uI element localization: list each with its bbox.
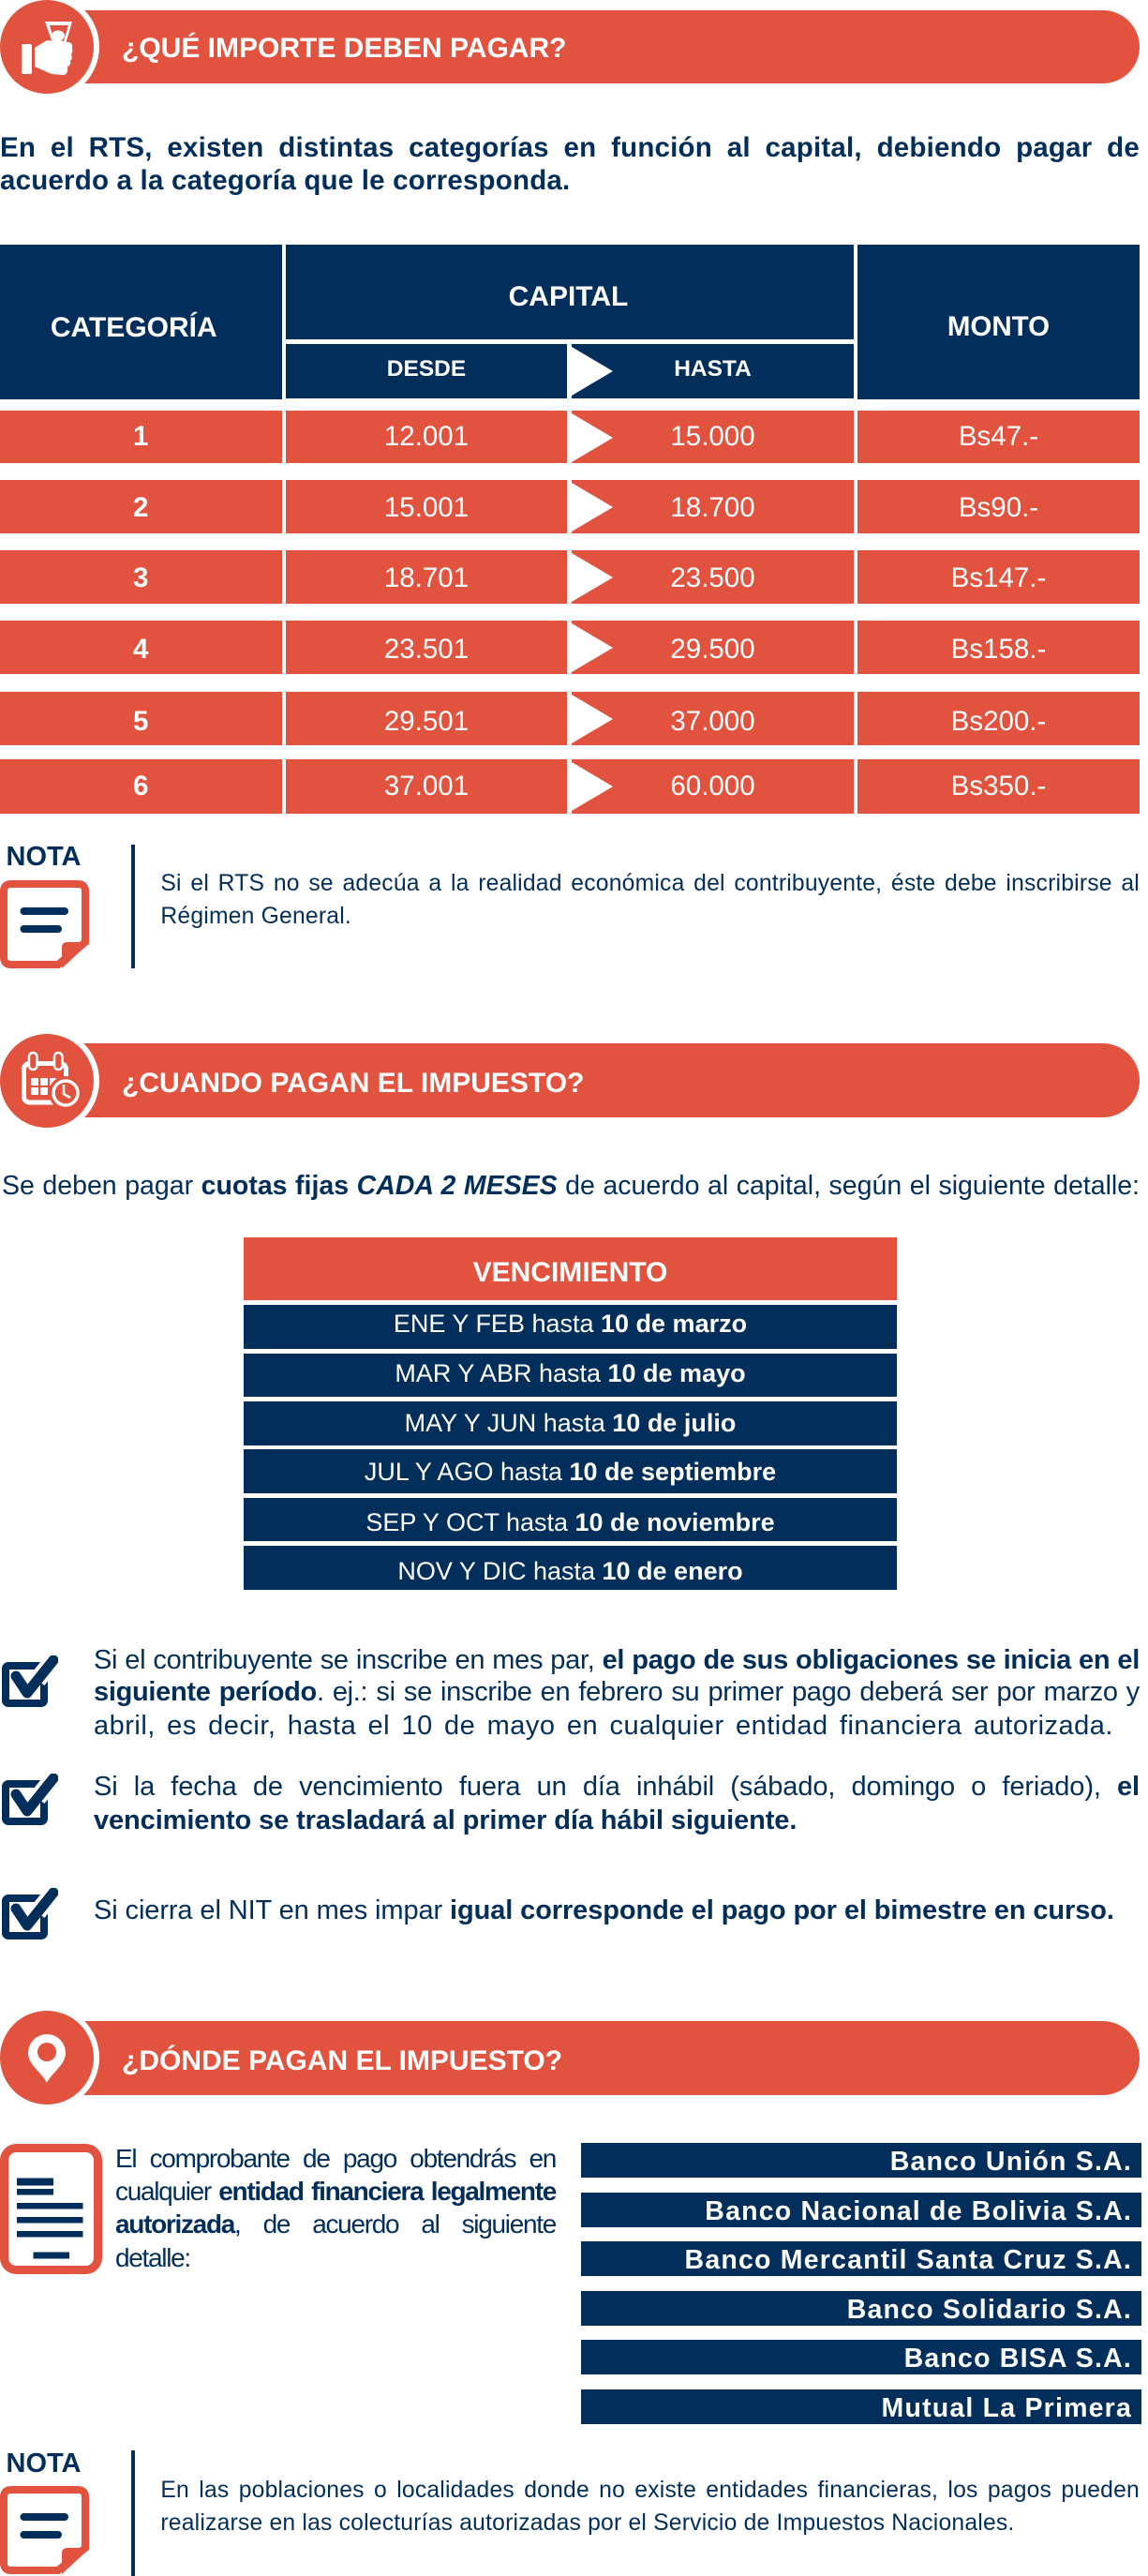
header: categoria: CATEGORÍA bbox=[51, 312, 217, 343]
row 4: 4 bbox=[133, 634, 148, 665]
heading: ¿DÓNDE PAGAN EL IMPUESTO? bbox=[122, 2045, 562, 2076]
bank 1: Banco Unión S.A. bbox=[890, 2147, 1132, 2177]
icon: checkbox bbox=[2, 1655, 58, 1707]
section banner: cuando pagan bbox=[0, 1034, 1140, 1128]
nota text: Régimen General. bbox=[160, 904, 351, 929]
row may jun: MAY Y JUN hasta 10 de julio bbox=[405, 1409, 736, 1437]
row 1: 12.001 bbox=[384, 421, 469, 452]
check item 3 bbox=[2, 1888, 1114, 1939]
row 5: 29.501 bbox=[384, 705, 469, 737]
row 2: 18.700 bbox=[670, 491, 755, 523]
vencimiento header: VENCIMIENTO bbox=[473, 1257, 667, 1288]
row 1: 15.000 bbox=[670, 421, 755, 452]
bank 4: Banco Solidario S.A. bbox=[847, 2295, 1132, 2325]
row sep oct bbox=[244, 1498, 897, 1541]
heading: ¿QUÉ IMPORTE DEBEN PAGAR? bbox=[122, 33, 566, 64]
row 6: Bs350.- bbox=[951, 771, 1046, 801]
row ene feb bbox=[244, 1305, 897, 1348]
check item 2 bbox=[2, 1772, 1140, 1835]
row 2: 2 bbox=[133, 491, 148, 523]
row 3 bbox=[0, 550, 1140, 604]
intro text: categorias: En el RTS, existen distintas categorías en función al capital, debiendo pagar de bbox=[0, 132, 1140, 163]
icon: note bbox=[0, 880, 89, 968]
icon: calendar and clock bbox=[0, 1034, 99, 1128]
header: capital bbox=[286, 245, 854, 339]
row may jun bbox=[244, 1401, 897, 1445]
text: comprobante de pago bbox=[115, 2144, 557, 2272]
nota text bbox=[160, 2477, 1140, 2535]
icon: hand holding money bbox=[0, 0, 99, 94]
panel: nota 1 bbox=[0, 842, 1140, 968]
header: capital: CAPITAL bbox=[509, 281, 628, 312]
row 5: 37.000 bbox=[670, 705, 755, 737]
row nov dic: NOV Y DIC hasta 10 de enero bbox=[397, 1557, 743, 1585]
bank 6 bbox=[581, 2389, 1141, 2424]
row ene feb: ENE Y FEB hasta 10 de marzo bbox=[394, 1309, 747, 1337]
bank 6: Mutual La Primera bbox=[882, 2393, 1132, 2423]
row 4 bbox=[0, 621, 1140, 674]
row 5: Bs200.- bbox=[951, 705, 1046, 737]
bank 2 bbox=[581, 2193, 1141, 2227]
text: comprobante de pago: El comprobante de pago obtendrás en bbox=[115, 2144, 556, 2173]
text: comprobante de pago: detalle: bbox=[115, 2243, 190, 2272]
icon: document bbox=[0, 2144, 102, 2274]
vencimiento header bbox=[244, 1237, 897, 1300]
check item 3: Si cierra el NIT en mes impar igual corresponde el pago por el bimestre en curso. bbox=[94, 1895, 1114, 1925]
row 3: Bs147.- bbox=[951, 562, 1046, 593]
row 1: Bs47.- bbox=[959, 421, 1038, 452]
header: desde bbox=[286, 344, 567, 397]
row 1: 1 bbox=[133, 421, 148, 452]
table: vencimiento bbox=[244, 1237, 897, 1590]
bank 3: Banco Mercantil Santa Cruz S.A. bbox=[685, 2245, 1132, 2275]
row 2: 15.001 bbox=[384, 491, 469, 523]
row 6: 6 bbox=[133, 771, 148, 801]
bank 2: Banco Nacional de Bolivia S.A. bbox=[705, 2196, 1132, 2226]
check item 2: vencimiento se trasladará al primer día hábil siguiente. bbox=[94, 1805, 797, 1835]
row mar abr: MAR Y ABR hasta 10 de mayo bbox=[395, 1359, 746, 1387]
row mar abr bbox=[244, 1354, 897, 1397]
row 6 bbox=[0, 759, 1140, 814]
row 2: Bs90.- bbox=[959, 491, 1038, 523]
arrow: header bbox=[572, 347, 613, 396]
header: hasta bbox=[572, 344, 854, 397]
row sep oct: SEP Y OCT hasta 10 de noviembre bbox=[365, 1507, 775, 1535]
row 4: 23.501 bbox=[384, 634, 469, 665]
row 4: 29.500 bbox=[670, 634, 755, 665]
intro text: categorias bbox=[0, 132, 1140, 196]
list: bancos bbox=[581, 2143, 1141, 2424]
check item 1: abril, es decir, hasta el 10 de mayo en cualquier entidad financiera autorizada. bbox=[94, 1711, 1113, 1741]
row jul ago: JUL Y AGO hasta 10 de septiembre bbox=[365, 1458, 776, 1486]
nota text: realizarse en las colecturías autorizadas por el Servicio de Impuestos Nacionales. bbox=[160, 2510, 1014, 2535]
row 3: 18.701 bbox=[384, 562, 469, 593]
bank 4 bbox=[581, 2291, 1141, 2326]
bank 5 bbox=[581, 2340, 1141, 2374]
check item 1: siguiente período. ej.: si se inscribe en febrero su primer pago deberá ser por marzo y bbox=[94, 1677, 1140, 1707]
icon: map pin bbox=[0, 2011, 99, 2104]
nota text: En las poblaciones o localidades donde no existe entidades financieras, los pagos pueden bbox=[160, 2477, 1140, 2503]
panel: nota 2 bbox=[0, 2449, 1140, 2576]
intro text: categorias: acuerdo a la categoría que le corresponda. bbox=[0, 165, 570, 196]
icon: checkbox bbox=[2, 1888, 58, 1939]
row 5: 5 bbox=[133, 705, 148, 737]
row 3: 3 bbox=[133, 562, 148, 593]
row 3: 23.500 bbox=[670, 562, 755, 593]
row nov dic bbox=[244, 1546, 897, 1590]
bank 1 bbox=[581, 2143, 1141, 2178]
header: desde: DESDE bbox=[387, 356, 466, 382]
row 1 bbox=[0, 411, 1140, 463]
row jul ago bbox=[244, 1449, 897, 1492]
row 2 bbox=[0, 480, 1140, 533]
header: hasta: HASTA bbox=[674, 356, 752, 382]
check item 1: Si el contribuyente se inscribe en mes par, el pago de sus obligaciones se inicia en el bbox=[94, 1645, 1140, 1675]
bank 3 bbox=[581, 2241, 1141, 2276]
text: cuotas fijas: Se deben pagar cuotas fijas CADA 2 MESES de acuerdo al capital, según el siguiente detalle: bbox=[2, 1171, 1140, 1201]
section banner: donde pagan bbox=[0, 2011, 1140, 2104]
table: categorias capital monto bbox=[0, 245, 1140, 814]
icon: checkbox bbox=[2, 1774, 58, 1825]
icon: note bbox=[0, 2486, 89, 2574]
text: comprobante de pago: cualquier entidad financiera legalmente bbox=[115, 2177, 556, 2206]
bank 5: Banco BISA S.A. bbox=[904, 2344, 1132, 2374]
check item 2: Si la fecha de vencimiento fuera un día inhábil (sábado, domingo o feriado), el bbox=[94, 1772, 1140, 1802]
nota label: NOTA bbox=[6, 842, 82, 872]
text: comprobante de pago: autorizada, de acuerdo al siguiente bbox=[115, 2209, 556, 2239]
nota label: NOTA bbox=[6, 2449, 82, 2479]
nota text bbox=[160, 871, 1140, 929]
row 5 bbox=[0, 692, 1140, 745]
check item 1 bbox=[2, 1645, 1140, 1741]
nota text: Si el RTS no se adecúa a la realidad económica del contribuyente, éste debe inscribirse al bbox=[160, 871, 1140, 896]
row 4: Bs158.- bbox=[951, 634, 1046, 665]
row 6: 37.001 bbox=[384, 771, 469, 801]
header: monto: MONTO bbox=[947, 311, 1050, 342]
heading: ¿CUANDO PAGAN EL IMPUESTO? bbox=[122, 1068, 584, 1099]
row 6: 60.000 bbox=[670, 771, 755, 801]
section banner: que importe deben pagar bbox=[0, 0, 1140, 94]
header: categoria bbox=[0, 245, 281, 399]
header: monto bbox=[857, 245, 1140, 399]
